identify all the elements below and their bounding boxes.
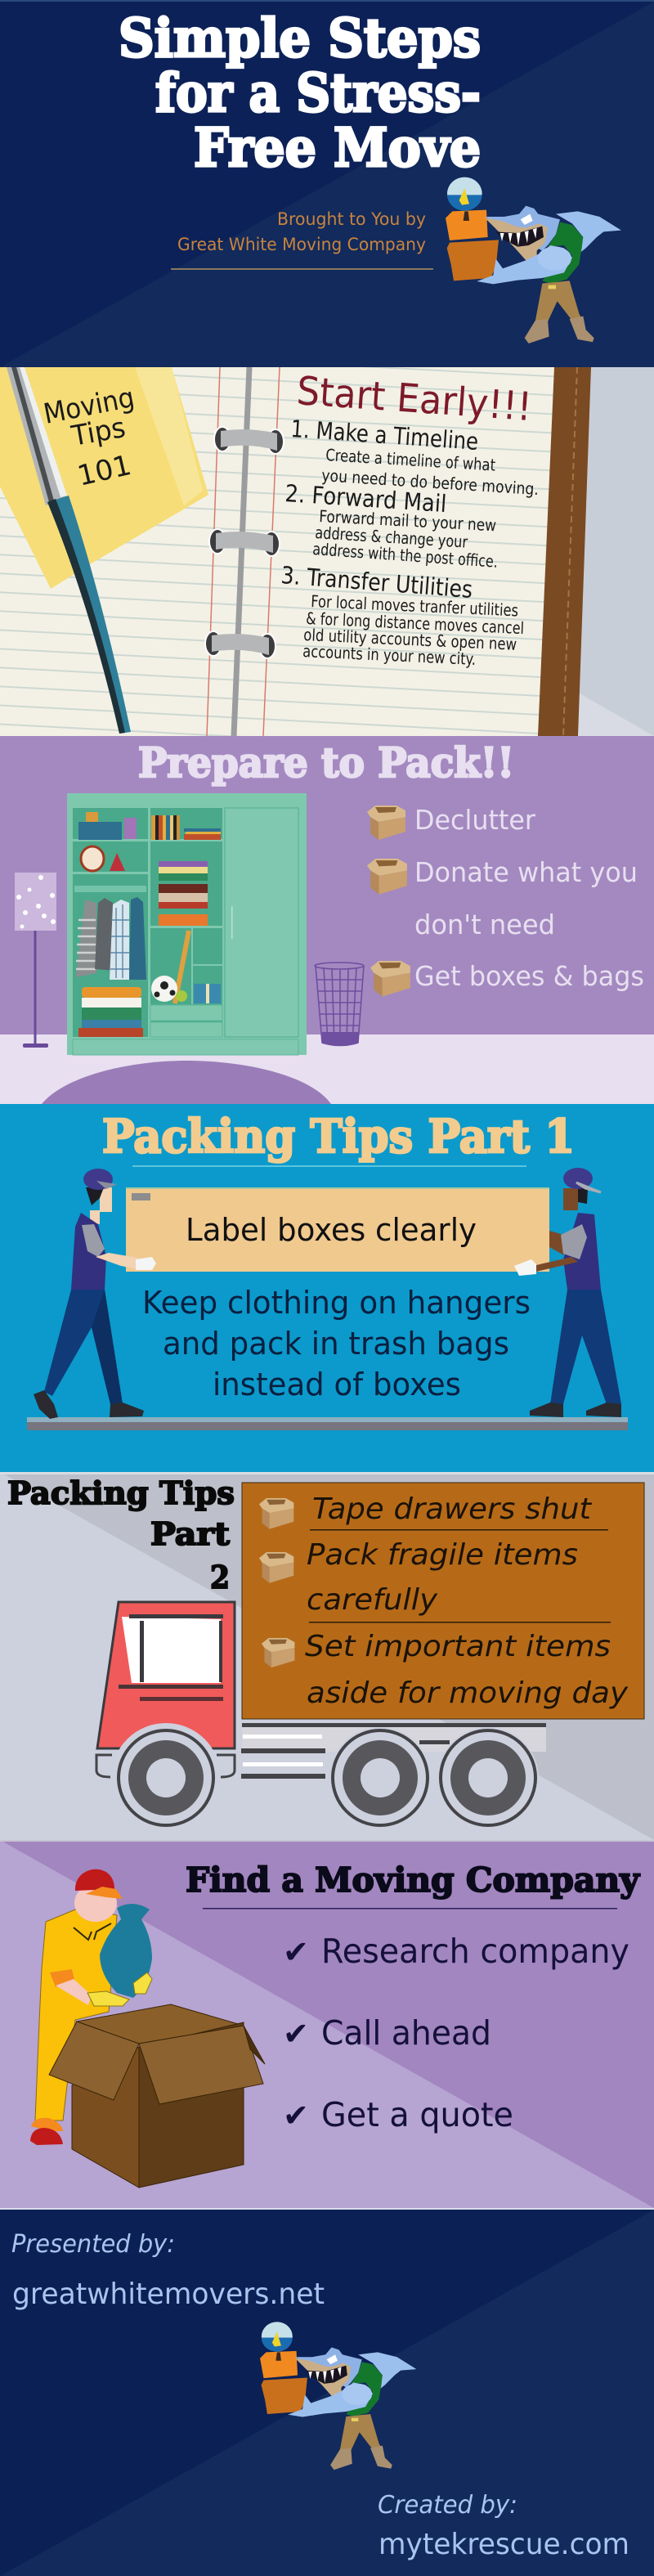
checklist: ✔ [283, 2098, 309, 2134]
text block: tips list: & for long distance moves cancel [306, 608, 525, 638]
leather cover [538, 367, 591, 736]
text block: brought to you by: Great White Moving Company [177, 235, 426, 254]
text block: prepare list: don't need [414, 909, 555, 940]
text block: tips list: you need to do before moving. [321, 465, 540, 499]
text block: prepare list: Get boxes & bags [414, 960, 644, 992]
callout: brown truck box: Tape drawers shut [312, 1492, 593, 1526]
heading: Packing Tips [7, 1474, 235, 1511]
title: Free Move [194, 117, 481, 179]
text block: tips list: 2. Forward Mail [284, 479, 447, 518]
panel: prepare to pack [0, 736, 654, 1104]
icon: shark mascot [446, 177, 621, 343]
sticky note: 101 [74, 449, 134, 493]
checklist: ✔ [283, 1934, 309, 1970]
panel: packing tips part 2 [0, 1472, 654, 1840]
text block: created by [378, 2491, 629, 2561]
box sign: Label boxes clearly [186, 1212, 477, 1248]
sticky note: Tips [69, 411, 128, 453]
text block: tips list: Create a timeline of what [325, 445, 496, 475]
text block: clothing: and pack in trash bags [163, 1326, 509, 1362]
text block: created by: mytekrescue.com [379, 2528, 629, 2561]
heading: Part [150, 1515, 230, 1552]
heading [7, 1474, 235, 1595]
text block: tips list: old utility accounts & open new [303, 625, 517, 654]
rug [42, 1061, 331, 1104]
lamp [15, 873, 56, 1048]
sticky note [0, 367, 208, 589]
icon: box bullets [367, 806, 410, 997]
text block: tips list: 1. Make a Timeline [290, 415, 479, 456]
heading: start early: Start Early!!! [295, 368, 533, 430]
text block: tips list: For local moves tranfer utilities [311, 591, 519, 621]
heading: Prepare to Pack!! [138, 738, 514, 787]
wardrobe with clothes [67, 793, 307, 1055]
text block: presented by: Presented by: [11, 2230, 175, 2259]
text block: presented by [11, 2230, 325, 2311]
callout: brown truck box: Set important items [305, 1630, 611, 1663]
text block: tips list: Forward mail to your new [319, 506, 497, 535]
text block: prepare list: Declutter [414, 804, 535, 836]
heading: Find a Moving Company [186, 1860, 640, 1900]
text block: brought to you by [171, 209, 433, 270]
callout: brown truck box: aside for moving day [307, 1676, 629, 1710]
panel: footer [0, 2208, 654, 2576]
callout: brown truck box: Pack fragile items [307, 1538, 578, 1572]
text block: tips list [280, 415, 540, 669]
open cardboard box [49, 2004, 265, 2188]
panel: find a moving company [0, 1840, 654, 2208]
panel: packing tips part 1 [0, 1104, 654, 1472]
text block: prepare list [414, 804, 644, 992]
text block: presented by: greatwhitemovers.net [12, 2278, 325, 2311]
panel: notebook start early [0, 367, 654, 736]
text block: prepare list: Donate what you [414, 856, 638, 888]
text block: tips list: address & change your [315, 523, 468, 552]
text block: tips list: 3. Transfer Utilities [280, 561, 473, 604]
pen [7, 367, 131, 734]
rings [205, 427, 284, 658]
text block: created by: Created by: [378, 2491, 517, 2520]
box sign [126, 1187, 549, 1272]
heading: 2 [210, 1559, 230, 1595]
mover left [34, 1169, 156, 1419]
text block: brought to you by: Brought to You by [277, 209, 426, 229]
title: for a Stress- [155, 62, 481, 124]
mover right [514, 1168, 621, 1417]
sticky note: Moving [41, 381, 137, 431]
panel: header [0, 0, 654, 367]
checklist: Research company [321, 1932, 629, 1971]
text block: tips list: accounts in your new city. [302, 641, 477, 669]
margin lines and binding [207, 367, 280, 736]
checklist: ✔ [283, 2016, 309, 2052]
mover with vase [30, 1869, 152, 2145]
icon: shark mascot [260, 2322, 416, 2470]
heading: Packing Tips Part 1 [102, 1110, 575, 1164]
text block: tips list: address with the post office. [312, 539, 499, 572]
callout: brown truck box [242, 1483, 644, 1719]
checklist: Get a quote [321, 2095, 513, 2134]
checklist: Call ahead [321, 2013, 491, 2053]
title [119, 7, 481, 179]
laundry basket [315, 963, 364, 1046]
text block: clothing [142, 1285, 531, 1402]
text block: clothing: instead of boxes [213, 1367, 461, 1402]
ground [27, 1417, 628, 1430]
title: Simple Steps [119, 7, 481, 70]
text block: clothing: Keep clothing on hangers [142, 1285, 531, 1321]
callout: brown truck box: carefully [307, 1583, 438, 1617]
truck [96, 1602, 546, 1833]
checklist [283, 1932, 629, 2134]
